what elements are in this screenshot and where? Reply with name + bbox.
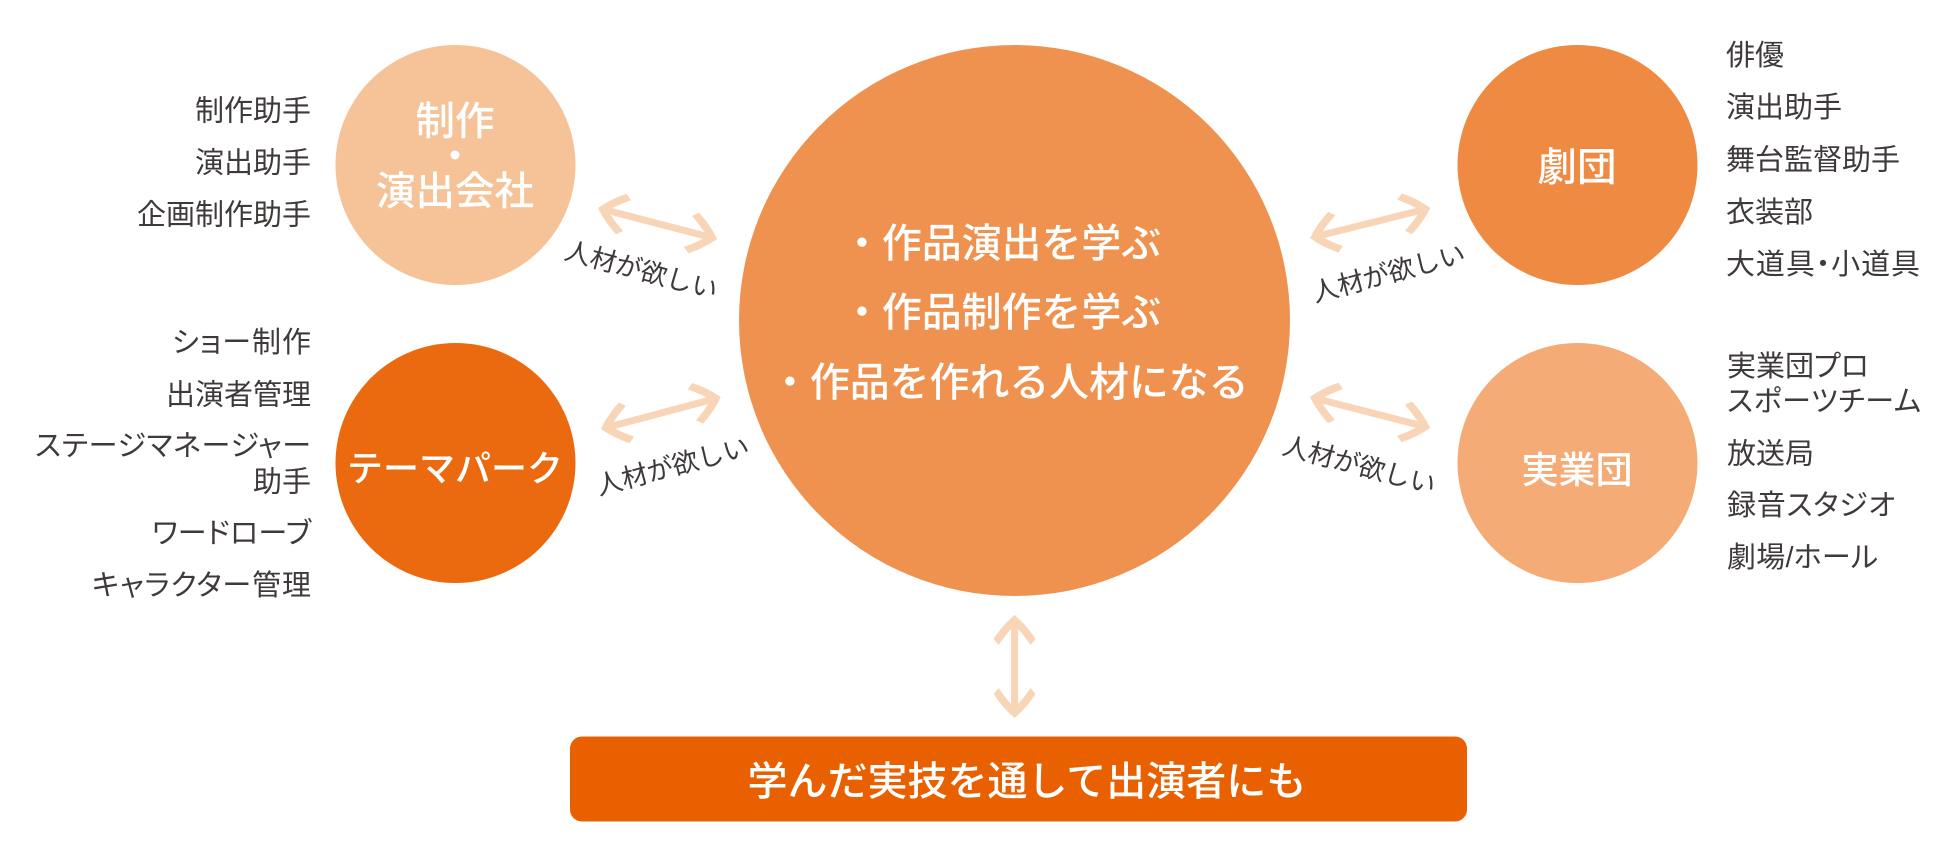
panel: production company circle: 演出会社 [376,170,534,214]
list: theatre company roles: 衣装部 [1726,196,1813,229]
label: wants talent, theatre company: 人材が欲しい [1309,238,1468,308]
list: production company roles: 企画制作助手 [137,198,311,232]
list: production company roles: 制作助手 [195,94,311,128]
panel: theme park circle [336,343,576,583]
center circle text: ・作品を作れる人材になる [770,361,1249,405]
arrow: center to theatre company [1305,188,1435,258]
list: theme park roles: 助手 [253,466,311,498]
arrow: center to corporate team [1305,377,1435,448]
list: theme park roles: キャラクター管理 [92,569,311,602]
list: theme park roles: 出演者管理 [166,378,311,412]
panel: corporate team circle [1458,343,1698,583]
panel: production company circle: 制作 [416,100,494,144]
arrow: center to bottom bar [994,615,1036,718]
label: wants talent, corporate team: 人材が欲しい [1280,430,1439,500]
arrow: production company to center [593,188,722,259]
panel: production company circle [336,45,576,285]
list: corporate team roles: 実業団プロ [1727,350,1869,383]
arrow: theme park to center [596,377,726,449]
label: wants talent, theme park: 人材が欲しい [593,431,752,501]
bottom bar: 学んだ実技を通して出演者にも [748,760,1306,804]
center circle text: ・作品演出を学ぶ [842,222,1161,266]
center circle text: ・作品制作を学ぶ [842,291,1161,335]
list: theatre company roles: 演出助手 [1726,91,1842,124]
panel: corporate team circle: 実業団 [1522,450,1632,491]
center circle text [770,222,1249,405]
list: theatre company roles: 俳優 [1726,39,1784,72]
list: corporate team roles: スポーツチーム [1727,385,1921,418]
list: theme park roles [35,326,313,602]
list: production company roles [137,94,311,232]
list: theatre company roles: 大道具・小道具 [1726,248,1920,281]
list: theatre company roles [1726,39,1920,281]
list: theatre company roles: 舞台監督助手 [1726,144,1900,176]
panel: theatre company circle [1458,45,1698,285]
panel: theatre company circle: 劇団 [1538,146,1616,190]
center circle [739,45,1290,596]
list: corporate team roles: 劇場/ホール [1727,541,1878,574]
bottom bar [570,736,1467,822]
list: corporate team roles: 放送局 [1727,438,1814,470]
list: theme park roles: ワードローブ [152,517,313,550]
label: wants talent, production company: 人材が欲しい [562,235,721,305]
list: theme park roles: ショー制作 [172,326,311,359]
list: production company roles: 演出助手 [195,146,311,180]
list: corporate team roles: 録音スタジオ [1727,489,1895,522]
list: corporate team roles [1727,350,1921,574]
list: theme park roles: ステージマネージャー [35,430,311,462]
panel: theme park circle: テーマパーク [347,448,563,489]
